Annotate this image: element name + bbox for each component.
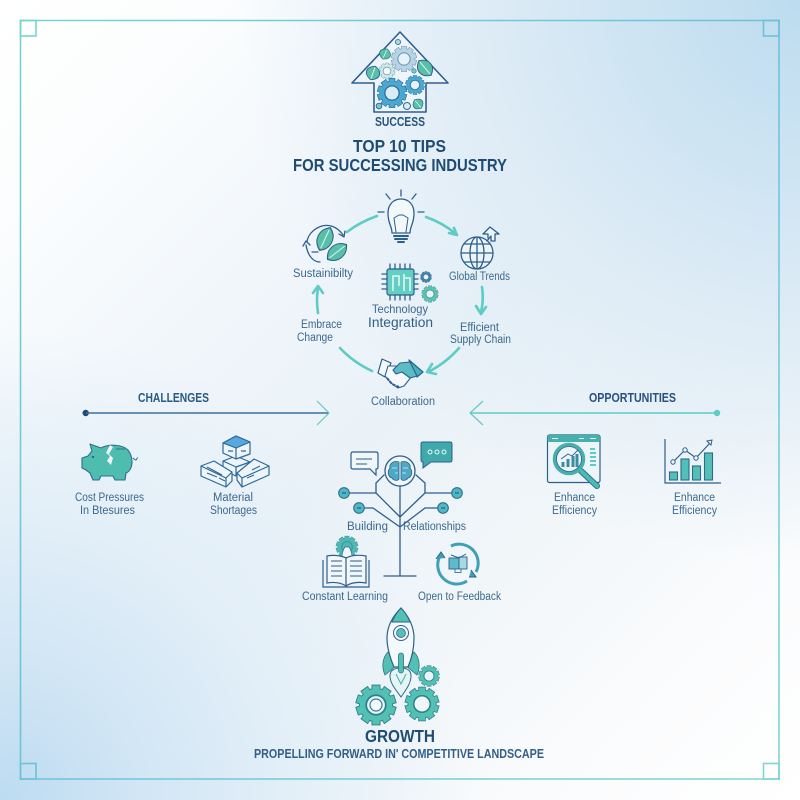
- label: enhance efficiency 1: [552, 492, 597, 517]
- tree nodes: [339, 488, 462, 513]
- icon: broken piggy bank: [82, 444, 138, 480]
- tagline: PROPELLING FORWARD IN' COMPETITIVE LANDSCAPE: [254, 747, 544, 761]
- icon: success house arrow with gears: [352, 32, 448, 112]
- icon: sustainability leaves: [303, 225, 351, 265]
- cycle arrows: [313, 216, 486, 374]
- icon: brain: [385, 456, 415, 486]
- label: technology integration: Integration: [368, 314, 433, 330]
- label: cost pressures: [75, 492, 144, 517]
- label: enhance efficiency 1: Efficiency: [552, 505, 597, 517]
- icon: material boxes: [201, 436, 269, 487]
- heading: opportunities: OPPORTUNITIES: [589, 391, 676, 405]
- label: technology integration: [368, 302, 433, 330]
- icon: open book with gear: [323, 536, 369, 587]
- label: enhance efficiency 1: Enhance: [554, 492, 595, 504]
- arrow: opportunities: [470, 401, 720, 425]
- heading: challenges: CHALLENGES: [138, 391, 209, 405]
- title: TOP 10 TIPS: [353, 136, 446, 156]
- icon: magnifier over window: [548, 435, 600, 486]
- label: technology integration: Technology: [372, 302, 428, 316]
- heading: growth: GROWTH: [365, 726, 435, 746]
- icon: rocket with gears: [356, 608, 439, 724]
- label: cost pressures: In Btesures: [80, 505, 135, 517]
- label: efficient supply chain: Supply Chain: [450, 334, 511, 346]
- icon: speech bubble left: [351, 452, 378, 475]
- label: efficient supply chain: Efficient: [460, 322, 500, 334]
- icon: handshake: [378, 359, 423, 388]
- label: open to feedback: Open to Feedback: [418, 591, 501, 603]
- label: embrace change: Embrace: [301, 319, 342, 331]
- label: collaboration: Collaboration: [371, 396, 435, 408]
- icon: technology chip and gears: [382, 264, 438, 302]
- title: FOR SUCCESSING INDUSTRY: [293, 155, 507, 175]
- label: embrace change: Change: [297, 332, 333, 344]
- title: [293, 136, 507, 175]
- icon: speech bubble right: [421, 442, 452, 468]
- icon: bar chart: [665, 439, 721, 483]
- icon: global trends: [461, 227, 499, 269]
- label: constant learning: Constant Learning: [302, 591, 388, 603]
- label: efficient supply chain: [450, 322, 511, 346]
- label: building relationships: [347, 521, 466, 533]
- label: building relationships: Relationships: [403, 521, 466, 533]
- label: embrace change: [297, 319, 342, 344]
- arrow: challenges: [82, 401, 329, 425]
- icon: feedback cycle: [436, 544, 478, 584]
- icon: light bulb: [378, 190, 424, 242]
- label: material shortages: [210, 492, 257, 517]
- label: building relationships: Building: [347, 521, 388, 533]
- label: success: SUCCESS: [375, 114, 425, 129]
- label: cost pressures: Cost Pressures: [75, 492, 144, 504]
- label: material shortages: Shortages: [210, 505, 257, 517]
- diagram: relationship tree: [339, 442, 462, 576]
- label: enhance efficiency 2: Efficiency: [672, 505, 717, 517]
- label: material shortages: Material: [213, 492, 253, 504]
- label: sustainability: Sustainibilty: [293, 268, 353, 280]
- label: global trends: Global Trends: [449, 271, 510, 283]
- label: enhance efficiency 2: [672, 492, 717, 517]
- label: enhance efficiency 2: Enhance: [674, 492, 715, 504]
